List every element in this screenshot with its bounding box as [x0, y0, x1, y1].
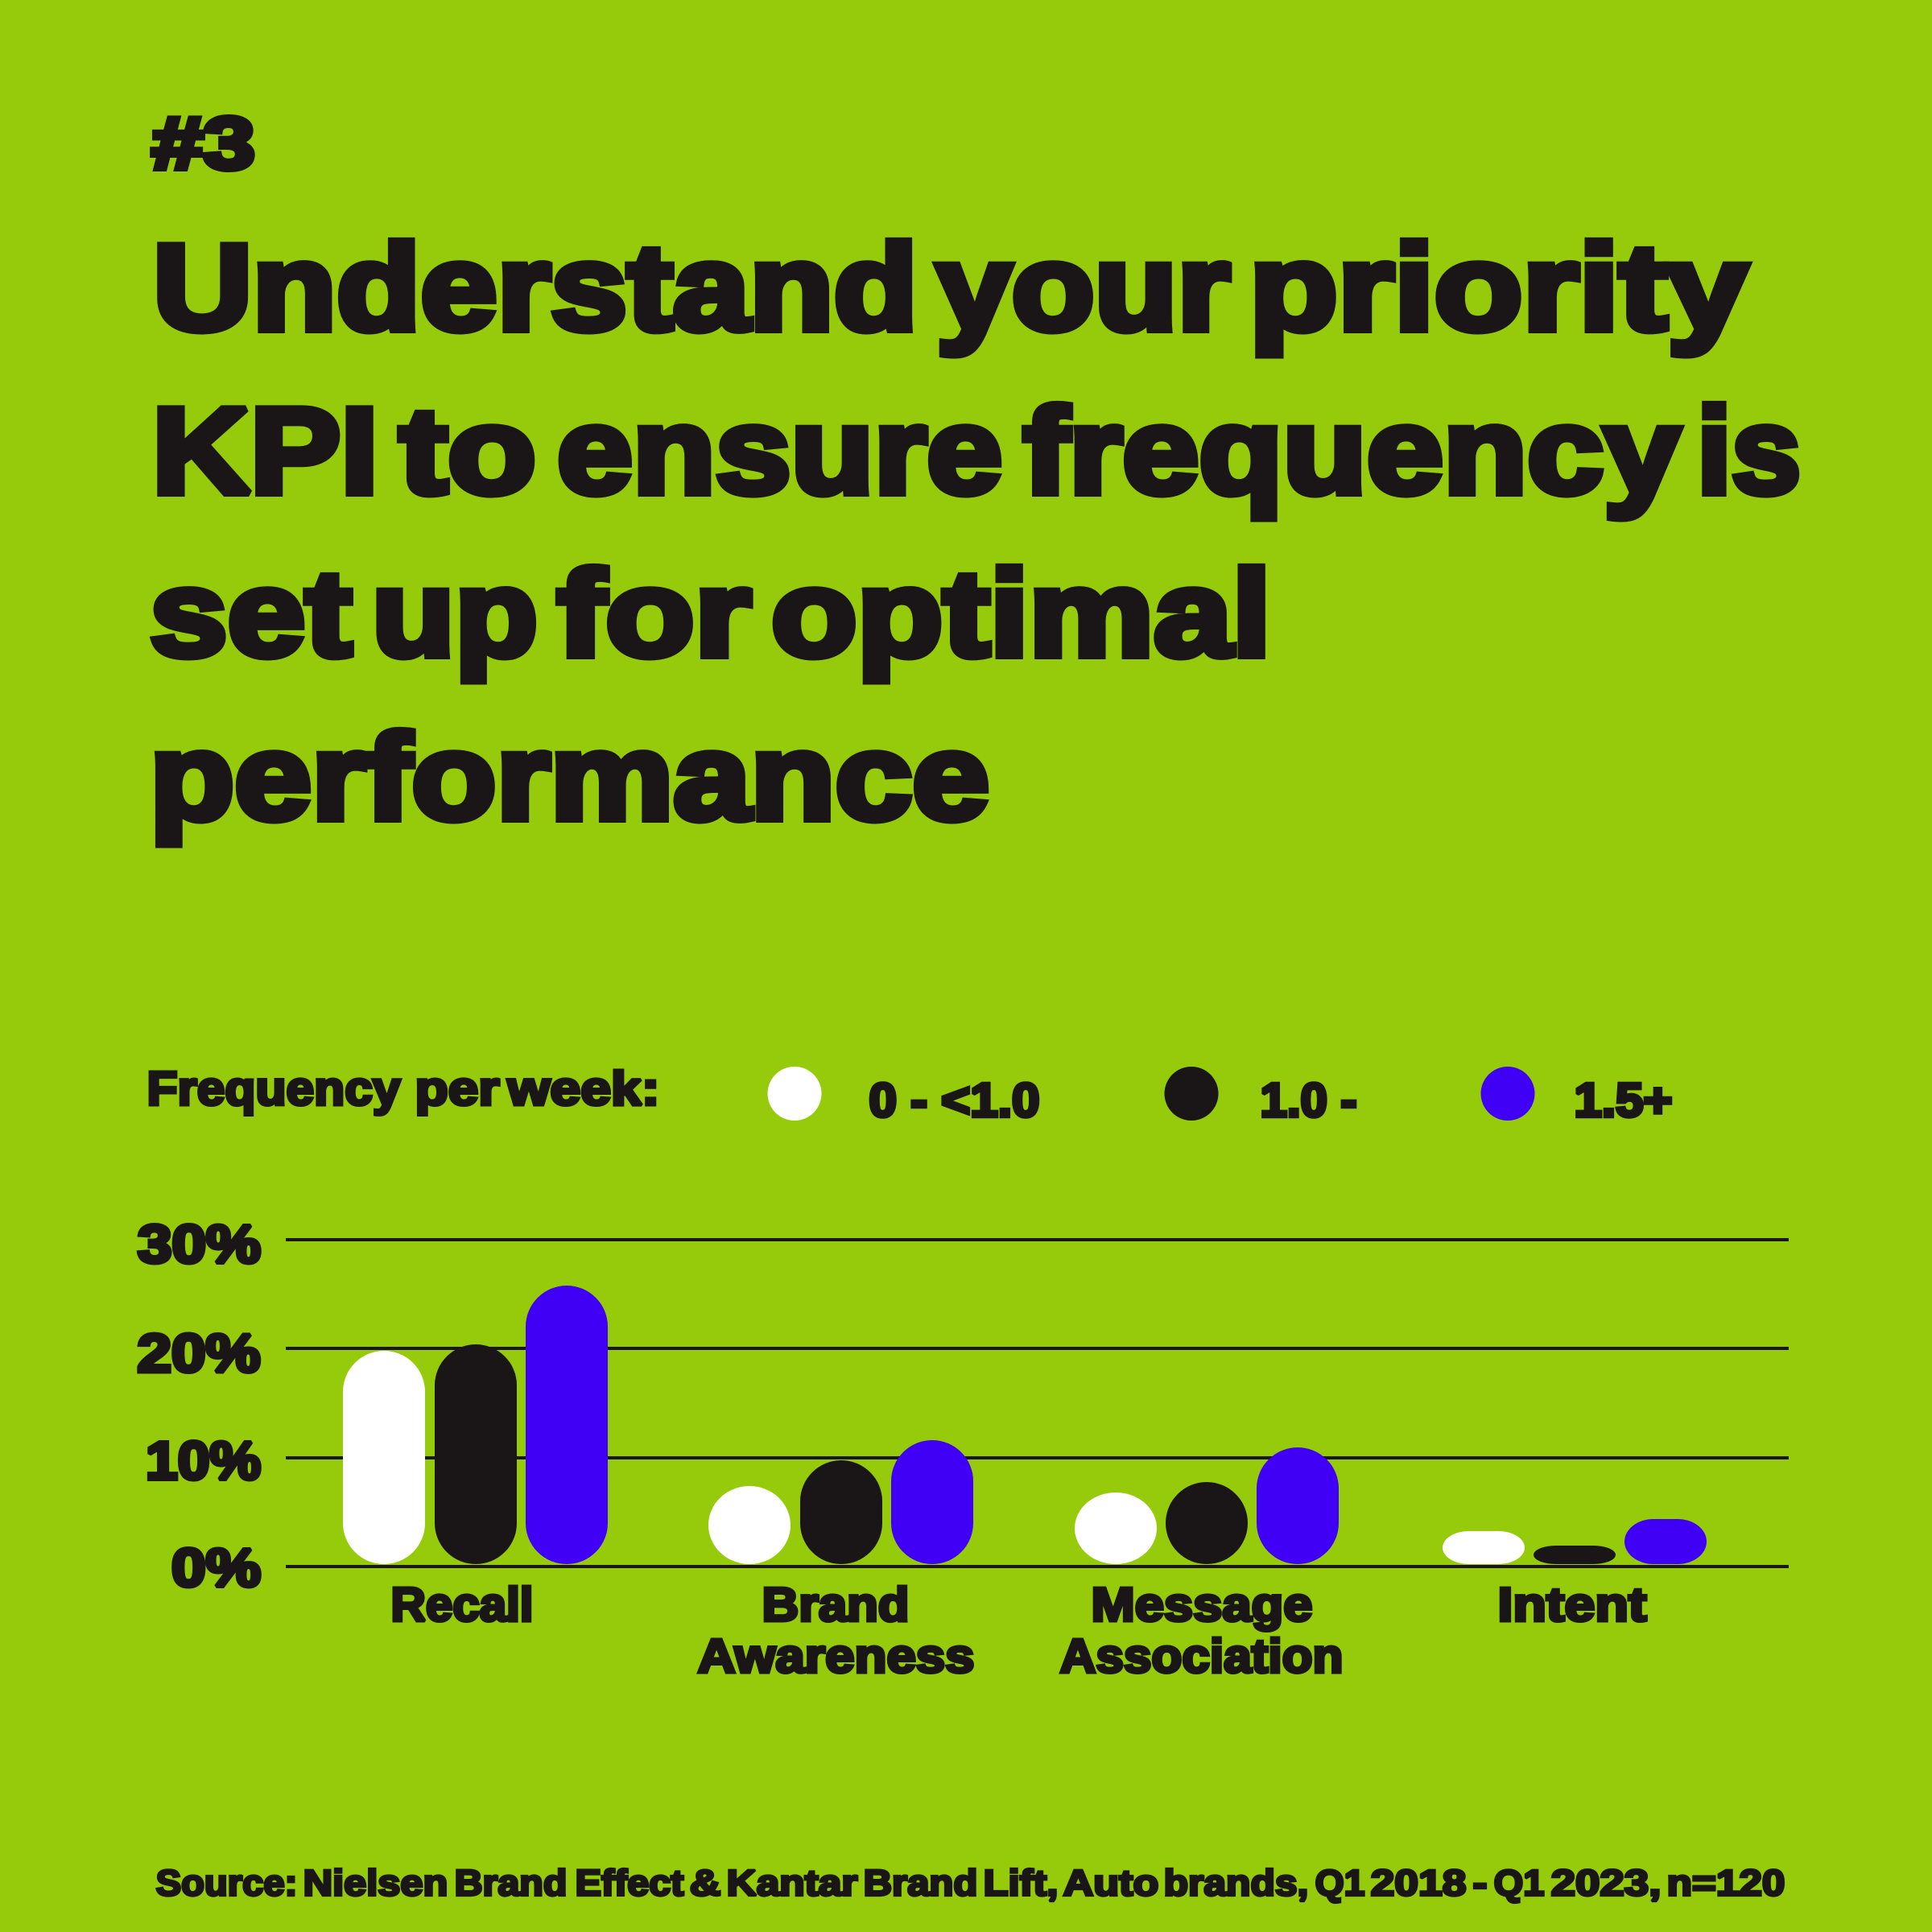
category label: Recall: Recall: [391, 1578, 533, 1631]
y axis labels: 10%: [146, 1431, 261, 1491]
source note: &: [690, 1863, 720, 1903]
category label: Brand Awareness: [697, 1578, 974, 1682]
y axis labels: 0%: [171, 1538, 261, 1599]
source note: Source:: [156, 1863, 297, 1903]
legend heading: week:: [506, 1063, 660, 1116]
bars: Intent: [1443, 1519, 1707, 1564]
y axis labels: 20%: [137, 1323, 261, 1384]
source note: Kantar: [727, 1863, 857, 1903]
category label: Message Association: [1059, 1578, 1343, 1682]
title: ensure: [557, 383, 1002, 520]
section number: #3: [151, 103, 254, 185]
y axis labels: [137, 1214, 261, 1599]
legend heading: Frequency: [147, 1063, 401, 1116]
legend label: 1.5+: 1.5+: [1575, 1074, 1673, 1127]
source note: Brand: [455, 1863, 567, 1903]
category label: Message Association: Message: [1092, 1578, 1312, 1631]
source note: [156, 1863, 1785, 1903]
legend swatch: blue: [1481, 1067, 1534, 1121]
source note: n=120: [1667, 1863, 1785, 1903]
source note: Lift,: [984, 1863, 1058, 1903]
category label: Brand Awareness: Awareness: [697, 1629, 974, 1682]
title: priority: [1249, 219, 1748, 356]
bars: Recall: [343, 1286, 608, 1564]
title: set: [150, 546, 352, 683]
bars: Message Association: [1075, 1447, 1339, 1564]
grid lines: [286, 1238, 1789, 1568]
title: optimal: [771, 546, 1271, 683]
title: your: [936, 219, 1230, 356]
source note: -: [1473, 1863, 1487, 1903]
source note: Brand: [864, 1863, 977, 1903]
legend heading: [147, 1063, 660, 1116]
title: Understand: [153, 219, 918, 356]
title: up: [372, 546, 538, 683]
category label: Message Association: Association: [1059, 1629, 1343, 1682]
source note: Q1: [1315, 1863, 1364, 1903]
source note: brands,: [1164, 1863, 1308, 1903]
source note: Q1: [1494, 1863, 1544, 1903]
title: performance: [150, 708, 989, 845]
y axis labels: 30%: [138, 1214, 261, 1275]
category label: Brand Awareness: Brand: [762, 1578, 910, 1631]
source note: Effect: [576, 1863, 683, 1903]
legend swatch: black: [1164, 1067, 1219, 1121]
legend label: 0 - <1.0: 0 - <1.0: [869, 1074, 1040, 1127]
title: for: [557, 546, 751, 683]
title: frequency: [1023, 383, 1680, 520]
bar chart: [137, 1214, 1789, 1682]
category label: Intent: Intent: [1497, 1578, 1647, 1631]
source note: Auto: [1063, 1863, 1158, 1903]
title: to: [399, 383, 536, 520]
source note: 2018: [1371, 1863, 1466, 1903]
legend label: 1.0 -: 1.0 -: [1261, 1074, 1357, 1127]
legend heading: per: [415, 1063, 500, 1116]
source note: 2023,: [1551, 1863, 1661, 1903]
bars: Brand Awareness: [708, 1440, 973, 1564]
title: [150, 219, 1801, 845]
title: is: [1697, 383, 1801, 520]
source note: Nielsen: [303, 1863, 448, 1903]
legend: [147, 1063, 1673, 1127]
legend swatch: white: [768, 1067, 821, 1121]
title: KPI: [152, 383, 378, 520]
